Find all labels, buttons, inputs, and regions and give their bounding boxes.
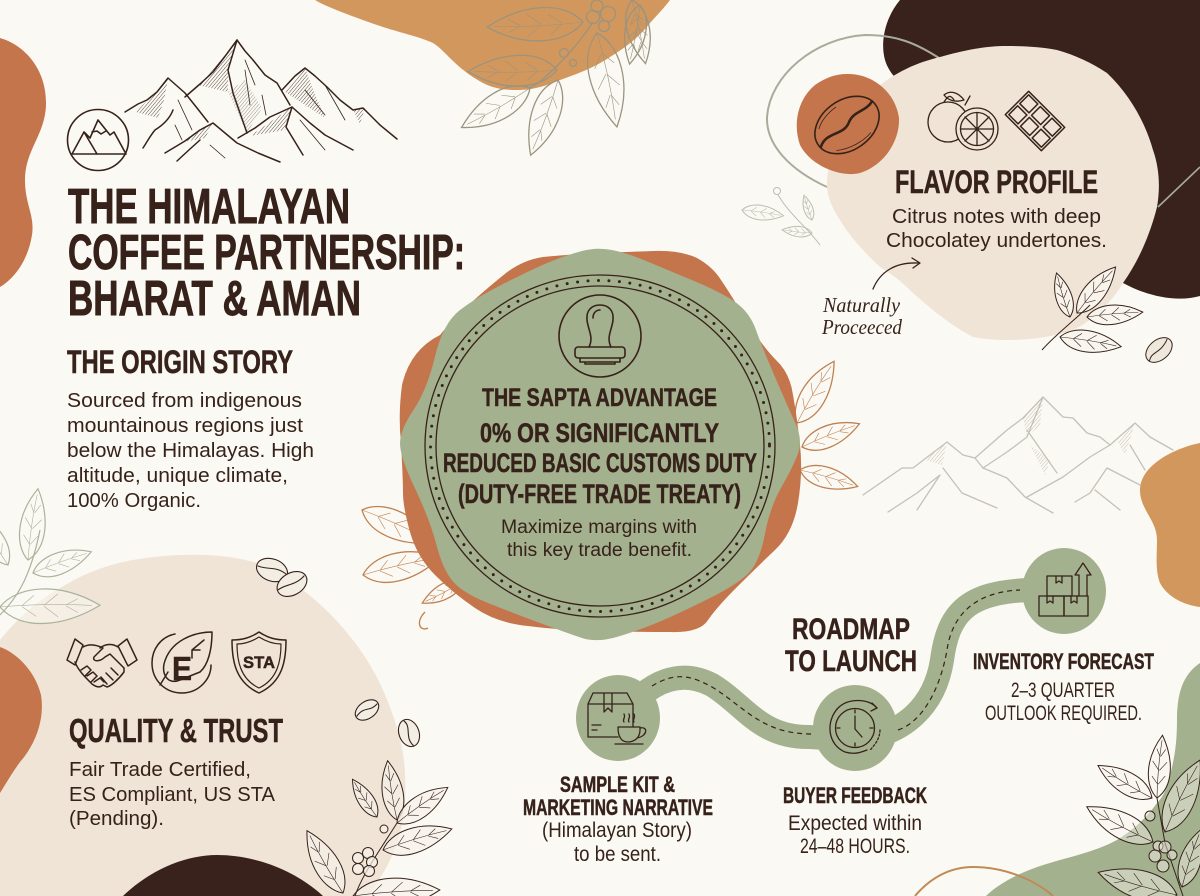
text: sample kit [523,772,713,866]
heading: roadmap: TO LAUNCH [785,645,917,678]
text: margins note [501,517,697,561]
illustration: faint mountains [863,397,1173,513]
text: flavor body [886,205,1107,252]
heading: origin story: THE ORIGIN STORY [67,344,293,380]
title: BHARAT & AMAN [68,272,361,326]
illustration: flavor sprig [1042,260,1144,357]
decorative loop line [767,35,942,187]
node: buyer feedback [813,685,897,771]
text: origin story body: mountainous regions just [67,415,303,437]
illustration: large mountain range [125,40,397,162]
icon: box and cup [588,693,646,744]
icon: STA shield [232,632,286,693]
text: origin story body: 100% Organic. [67,490,201,512]
heading: flavor profile: FLAVOR PROFILE [895,164,1098,200]
text: flavor body: Citrus notes with deep [892,205,1101,228]
icon: clock [830,700,880,753]
blob: bottom right sage [986,663,1200,896]
heading: quality and trust: QUALITY & TRUST [69,712,283,749]
blob: top sand [315,0,670,90]
text: buyer feedback: 24–48 HOURS. [800,835,910,858]
text: margins note: this key trade benefit. [507,540,692,561]
blob: bottom left terracotta [0,647,42,793]
text: quality body: (Pending). [69,808,164,830]
heading: roadmap: ROADMAP [792,613,910,646]
panel: flavor profile [797,46,1200,357]
text: origin story body: below the Himalayas. High [67,440,314,462]
panel: roadmap to launch [523,548,1154,866]
illustration: faint sprig [741,188,820,245]
icon: leaf certification: E [172,650,192,687]
blob: flavor beige [827,46,1159,340]
icon: STA shield: STA [243,653,275,672]
text: origin story body: Sourced from indigenous [67,390,302,412]
text: sample kit: (Himalayan Story) [542,819,692,842]
text: handwritten note: Proceeced [821,315,902,339]
text: inventory forecast: 2–3 QUARTER [1011,679,1115,702]
decorative arc: copper [915,867,1053,896]
road centre dashes [652,590,1020,734]
blob: bottom dark [123,855,323,896]
text: buyer feedback: Expected within [788,812,922,835]
illustration: faint sprig left [0,487,100,624]
text: customs duty statement [443,418,757,509]
panel: quality and trust [67,632,286,830]
panel: SAPTA stamp [400,249,801,640]
text: sample kit: MARKETING NARRATIVE [523,795,713,820]
text: quality body: Fair Trade Certified, [69,759,251,781]
icon: handshake [67,639,137,687]
title [68,180,465,326]
text: handwritten note [821,293,902,339]
blob: terracotta flower [400,251,801,632]
text: handwritten note: Naturally [822,293,901,317]
text: buyer feedback: BUYER FEEDBACK [783,783,927,808]
blob: right sand [1140,443,1200,607]
text: quality body [69,759,276,830]
blob: terracotta bean backing [797,74,899,174]
icon: orange with slice [928,92,998,150]
text: quality body: ES Compliant, US STA [69,784,276,806]
text: customs duty statement: REDUCED BASIC CUSTOMS DUTY [443,448,757,478]
arrow: curved pointer [873,258,920,289]
heading: roadmap [785,613,917,678]
node: sample kit [576,675,660,761]
heading: SAPTA advantage: THE SAPTA ADVANTAGE [482,384,717,412]
title: COFFEE PARTNERSHIP: [68,226,465,280]
node: inventory forecast [1022,548,1106,634]
icon: chocolate bar [1005,91,1065,151]
callout: naturally processed [821,258,920,339]
icon: leaf certification [152,632,212,693]
blob: sage seal [400,249,800,640]
text: buyer feedback [783,783,927,858]
text: sample kit: SAMPLE KIT & [560,772,675,797]
text: origin story body [67,390,314,512]
icon: mountain badge [68,110,128,170]
text: customs duty statement: 0% OR SIGNIFICANTLY [480,418,719,448]
blob: bottom left beige [0,555,405,896]
illustration: top coffee sprig [455,0,657,160]
illustration: bottom left sprig [296,759,455,896]
blob: top right dark [883,0,1200,299]
road: winding path [625,590,1030,740]
text: inventory forecast [973,649,1154,725]
title: THE HIMALAYAN [68,180,350,234]
illustration: bottom right sprig [1081,734,1200,896]
text: flavor body: Chocolatey undertones. [886,229,1107,252]
stamp ring [425,275,775,617]
icon: rubber stamp [559,295,641,377]
text: margins note: Maximize margins with [501,517,697,538]
illustration: coffee beans [253,554,423,750]
text: origin story body: altitude, unique climate, [67,465,288,487]
blob: left terracotta [0,38,46,287]
icon: coffee bean [804,84,890,166]
text: sample kit: to be sent. [574,843,661,866]
text: customs duty statement: (DUTY-FREE TRADE TREATY) [458,479,741,509]
illustration: copper leaves behind stamp [356,355,863,629]
decorative line right [1158,167,1200,207]
icon: small bean right [1141,333,1177,367]
icon: boxes and arrow [1039,563,1091,616]
section: the origin story [67,344,314,512]
